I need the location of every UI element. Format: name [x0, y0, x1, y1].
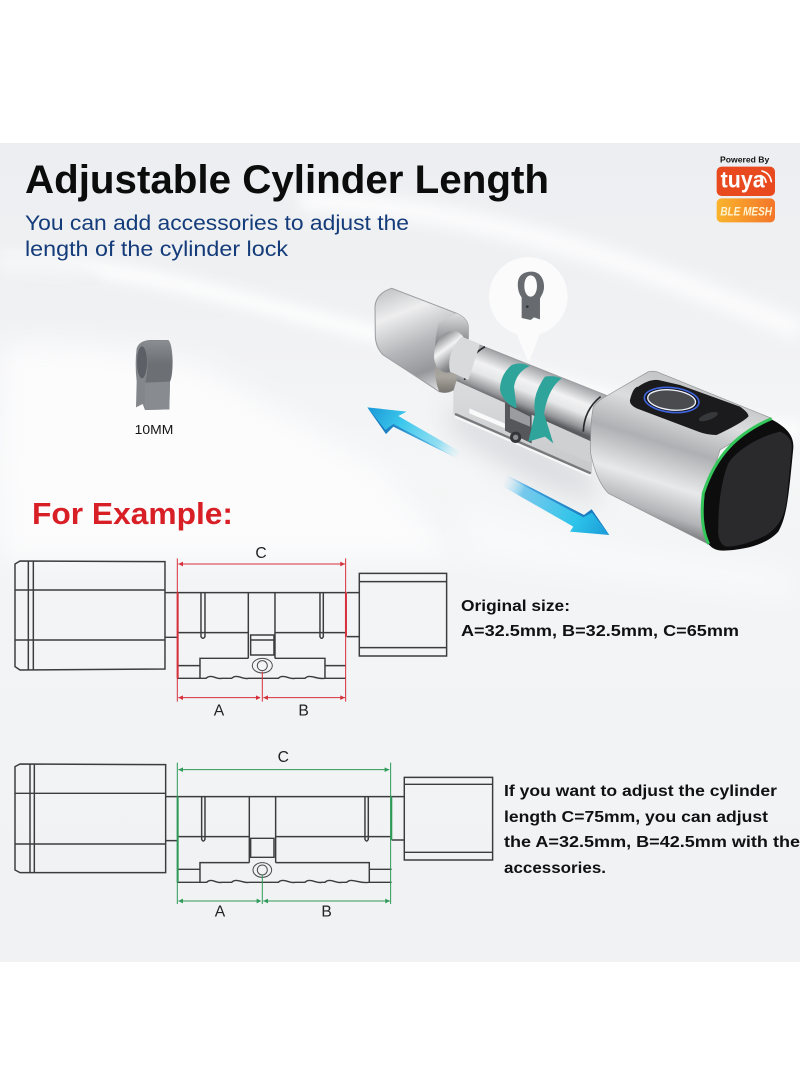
mounting plate: [453, 380, 593, 476]
dimension labels: C: [278, 749, 289, 766]
main lock body: [591, 371, 793, 551]
product: smart cylinder lock: [367, 257, 793, 551]
background panel: [0, 143, 800, 962]
dimension labels: [214, 545, 309, 719]
dimension lines: [177, 558, 346, 702]
note: adjusted size: length C=75mm, you can adjust: [504, 809, 768, 826]
dimension labels: [215, 749, 332, 921]
subtitle: You can add accessories to adjust the: [25, 212, 409, 235]
diagram: original size: [15, 545, 447, 719]
dimension labels: A: [214, 702, 225, 719]
diagram: adjusted size: [15, 749, 493, 921]
fingerprint sensor panel: [630, 380, 748, 435]
teal adjustment rings: [500, 364, 562, 443]
accessory: 10mm spacer: 10MM: [135, 423, 173, 437]
note: original size: A=32.5mm, B=32.5mm, C=65mm: [461, 623, 739, 640]
logo: powered by tuya BLE mesh: BLE MESH: [720, 204, 772, 218]
logo: powered by tuya BLE mesh: [717, 154, 775, 222]
title: Adjustable Cylinder Length: [25, 158, 549, 202]
left thumb knob: [375, 288, 480, 393]
note: adjusted size: the A=32.5mm, B=42.5mm with the: [504, 834, 800, 851]
accessory: 10mm spacer: [135, 340, 173, 437]
note: original size: [461, 598, 739, 640]
subtitle: length of the cylinder lock: [25, 238, 289, 261]
note: adjusted size: accessories.: [504, 860, 606, 877]
dimension labels: C: [255, 545, 267, 562]
logo: powered by tuya BLE mesh: Powered By: [720, 154, 770, 164]
dimension labels: B: [298, 702, 309, 719]
subtitle: [25, 212, 409, 261]
arrow: left: [367, 407, 460, 458]
dimension labels: A: [215, 904, 226, 921]
dimension labels: B: [321, 904, 332, 921]
logo: powered by tuya BLE mesh: tuya: [721, 167, 765, 193]
note: adjusted size: If you want to adjust the cylinder: [504, 783, 777, 800]
note: adjusted size: [504, 783, 800, 877]
arrow: right: [503, 475, 609, 535]
cylinder shaft: [447, 337, 607, 442]
note: original size: Original size:: [461, 598, 570, 615]
speech bubble with accessory: [489, 257, 568, 363]
dimension lines: [177, 763, 391, 904]
heading: for example: For Example:: [32, 496, 233, 531]
